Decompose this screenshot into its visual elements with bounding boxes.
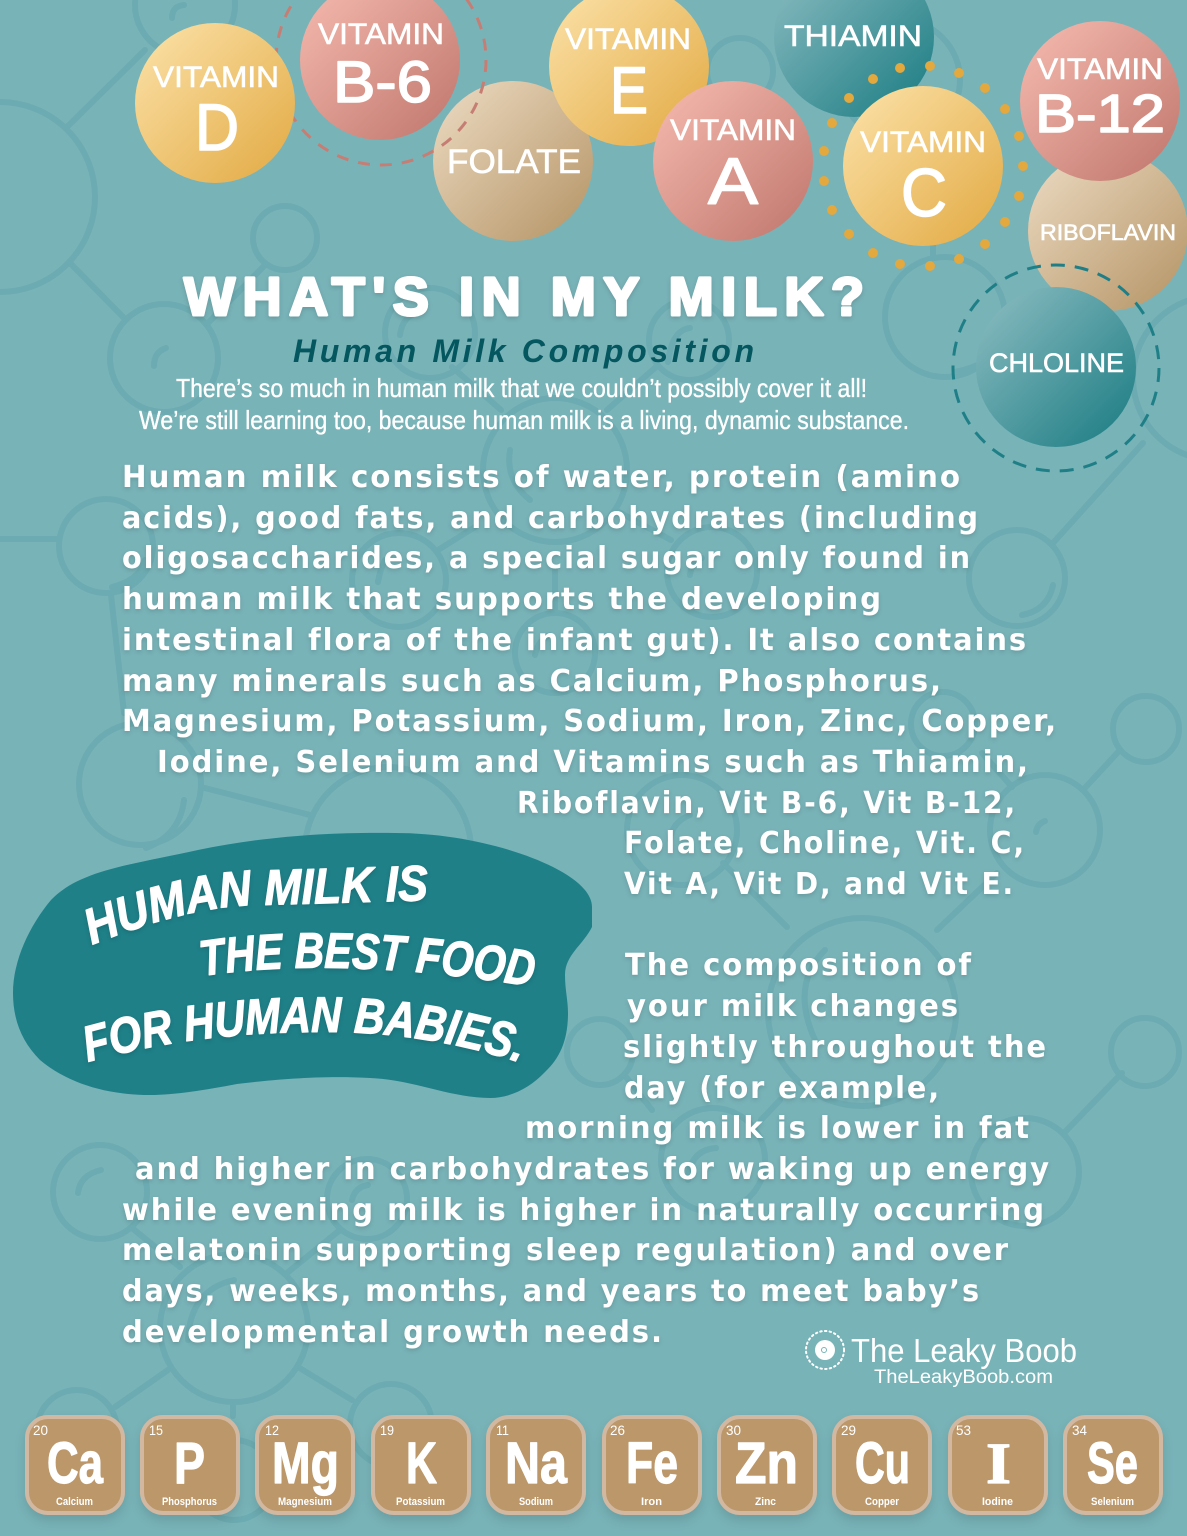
tile: zinc: 30 [726, 1422, 741, 1438]
tile: selenium: Selenium [1091, 1496, 1134, 1508]
tile: calcium [27, 1417, 123, 1513]
body text: changes paragraph: The composition of [625, 948, 973, 983]
body text: composition paragraph: Riboflavin, Vit B-6, Vit B-12, [517, 786, 1017, 821]
body text: changes paragraph: days, weeks, months, and years to meet baby’s [122, 1274, 981, 1309]
tile: selenium: Se [1087, 1431, 1138, 1496]
tile: calcium: Ca [47, 1431, 104, 1496]
bubble: vitamin D: D [195, 90, 239, 164]
bubble: vitamin B-12: VITAMIN [1037, 53, 1163, 86]
logo url: TheLeakyBoob.com [874, 1367, 1053, 1388]
bubble: choline [976, 287, 1136, 447]
bubble: vitamin A [653, 81, 813, 241]
tile: magnesium: Magnesium [278, 1496, 332, 1508]
tile: zinc: Zinc [755, 1496, 776, 1508]
body text: changes paragraph: day (for example, [624, 1071, 941, 1106]
bubble: vitamin B-6 [300, 0, 460, 140]
body text: composition paragraph: Magnesium, Potassium, Sodium, Iron, Zinc, Copper, [122, 704, 1058, 739]
tile: sodium: 11 [496, 1422, 509, 1438]
bubble: riboflavin [1028, 151, 1187, 311]
tile: phosphorus: 15 [149, 1422, 163, 1438]
bubble: folate: FOLATE [447, 143, 581, 181]
dotted ring: vitamin C [819, 61, 1028, 271]
mineral element tiles [27, 1417, 1161, 1513]
callout blob [13, 832, 592, 1098]
bubble: vitamin B-12: B-12 [1035, 84, 1165, 144]
tile: phosphorus: Phosphorus [162, 1496, 217, 1508]
body text: composition paragraph: Iodine, Selenium and Vitamins such as Thiamin, [157, 745, 1030, 780]
body text: composition paragraph: human milk that supports the developing [122, 582, 883, 617]
body text: changes paragraph: your milk changes [627, 989, 960, 1024]
tile: calcium: 20 [33, 1422, 48, 1438]
body text: composition paragraph: Human milk consists of water, protein (amino [122, 460, 962, 495]
tile: magnesium: 12 [265, 1422, 279, 1438]
tile: copper: Cu [855, 1431, 910, 1496]
tile: potassium: Potassium [396, 1496, 445, 1508]
bubble: vitamin B-6: VITAMIN [318, 18, 444, 51]
tile: zinc: Zn [735, 1431, 798, 1496]
title: WHAT'S IN MY MILK? [184, 267, 864, 327]
callout text [84, 865, 535, 1064]
body text: changes paragraph: and higher in carbohydrates for waking up energy [135, 1152, 1051, 1187]
tile: potassium: K [406, 1431, 437, 1496]
bubble: vitamin E: VITAMIN [565, 23, 691, 56]
bubble: vitamin A: A [708, 144, 758, 218]
bubble: vitamin D: VITAMIN [153, 61, 279, 94]
body text: composition paragraph: Folate, Choline, Vit. C, [624, 826, 1026, 861]
bubble: vitamin C: VITAMIN [860, 126, 986, 159]
body text: changes paragraph: developmental growth needs. [122, 1315, 664, 1350]
body text: changes paragraph [122, 948, 1051, 1350]
bubble: vitamin A: VITAMIN [670, 114, 796, 147]
body text: composition paragraph: Vit A, Vit D, and Vit E. [624, 867, 1015, 902]
tile: sodium: Na [505, 1431, 568, 1496]
bubble: thiamin: THIAMIN [784, 20, 922, 53]
bubble: vitamin C: C [901, 155, 947, 231]
tile: selenium [1065, 1417, 1161, 1513]
tile: magnesium: Mg [272, 1431, 339, 1496]
tile: copper: Copper [865, 1496, 900, 1508]
body text: changes paragraph: slightly throughout the [623, 1030, 1048, 1065]
tile: iron [604, 1417, 700, 1513]
tile: iodine [950, 1417, 1046, 1513]
bubble: vitamin B-12 [1020, 21, 1180, 181]
bubble: vitamin B-6: B-6 [333, 50, 432, 115]
tile: iodine: Iodine [982, 1496, 1013, 1508]
tile: potassium [373, 1417, 469, 1513]
tile: zinc [719, 1417, 815, 1513]
bubble: riboflavin: RIBOFLAVIN [1040, 220, 1176, 245]
tile: magnesium [257, 1417, 353, 1513]
tile: calcium: Calcium [56, 1496, 93, 1508]
body text: composition paragraph: many minerals such as Calcium, Phosphorus, [122, 664, 943, 699]
tile: potassium: 19 [380, 1422, 394, 1438]
logo: The Leaky Boob [806, 1331, 1077, 1388]
bubble: vitamin E [549, 0, 709, 146]
body text: composition paragraph: intestinal flora of the infant gut). It also contains [122, 623, 1028, 658]
intro text: There’s so much in human milk that we couldn’t possibly cover it all! [176, 373, 867, 403]
tile: phosphorus: P [174, 1431, 205, 1496]
tile: selenium: 34 [1072, 1422, 1087, 1438]
body text: composition paragraph [122, 460, 1058, 902]
callout text: FOR HUMAN BABIES. [84, 996, 520, 1064]
body text: changes paragraph: morning milk is lower in fat [525, 1111, 1031, 1146]
body text: changes paragraph: melatonin supporting sleep regulation) and over [122, 1233, 1010, 1268]
tile: iodine: I [986, 1431, 1011, 1496]
icon: dotted circle logo [806, 1331, 844, 1369]
tile: iron: Fe [626, 1431, 678, 1496]
tile: copper: 29 [841, 1422, 856, 1438]
tile: phosphorus [142, 1417, 238, 1513]
vitamin bubbles cluster [135, 0, 1187, 471]
dashed ring: vitamin B-6 [276, 0, 486, 165]
body text: composition paragraph: oligosaccharides, a special sugar only found in [122, 541, 972, 576]
callout text: HUMAN MILK IS [85, 865, 428, 946]
tile: iron: Iron [641, 1496, 662, 1508]
intro text: We’re still learning too, because human milk is a living, dynamic substance. [139, 405, 909, 435]
dashed ring: choline [953, 265, 1159, 471]
bubble: folate [433, 81, 593, 241]
bubble: choline: CHLOLINE [989, 348, 1124, 378]
subtitle: Human Milk Composition [293, 333, 754, 369]
bubble: vitamin E: E [610, 53, 648, 127]
bubble: thiamin [774, 0, 934, 117]
tile: sodium: Sodium [519, 1496, 553, 1508]
tile: copper [834, 1417, 930, 1513]
bubble: vitamin D [135, 23, 295, 183]
intro text [139, 373, 909, 435]
body text: changes paragraph: while evening milk is higher in naturally occurring [122, 1193, 1046, 1228]
tile: iodine: 53 [956, 1422, 971, 1438]
callout text: THE BEST FOOD [200, 932, 535, 987]
logo wordmark: The Leaky Boob [851, 1332, 1077, 1369]
tile: iron: 26 [610, 1422, 625, 1438]
tile: sodium [488, 1417, 584, 1513]
body text: composition paragraph: acids), good fats, and carbohydrates (including [122, 501, 980, 536]
bubble: vitamin C [843, 86, 1003, 246]
